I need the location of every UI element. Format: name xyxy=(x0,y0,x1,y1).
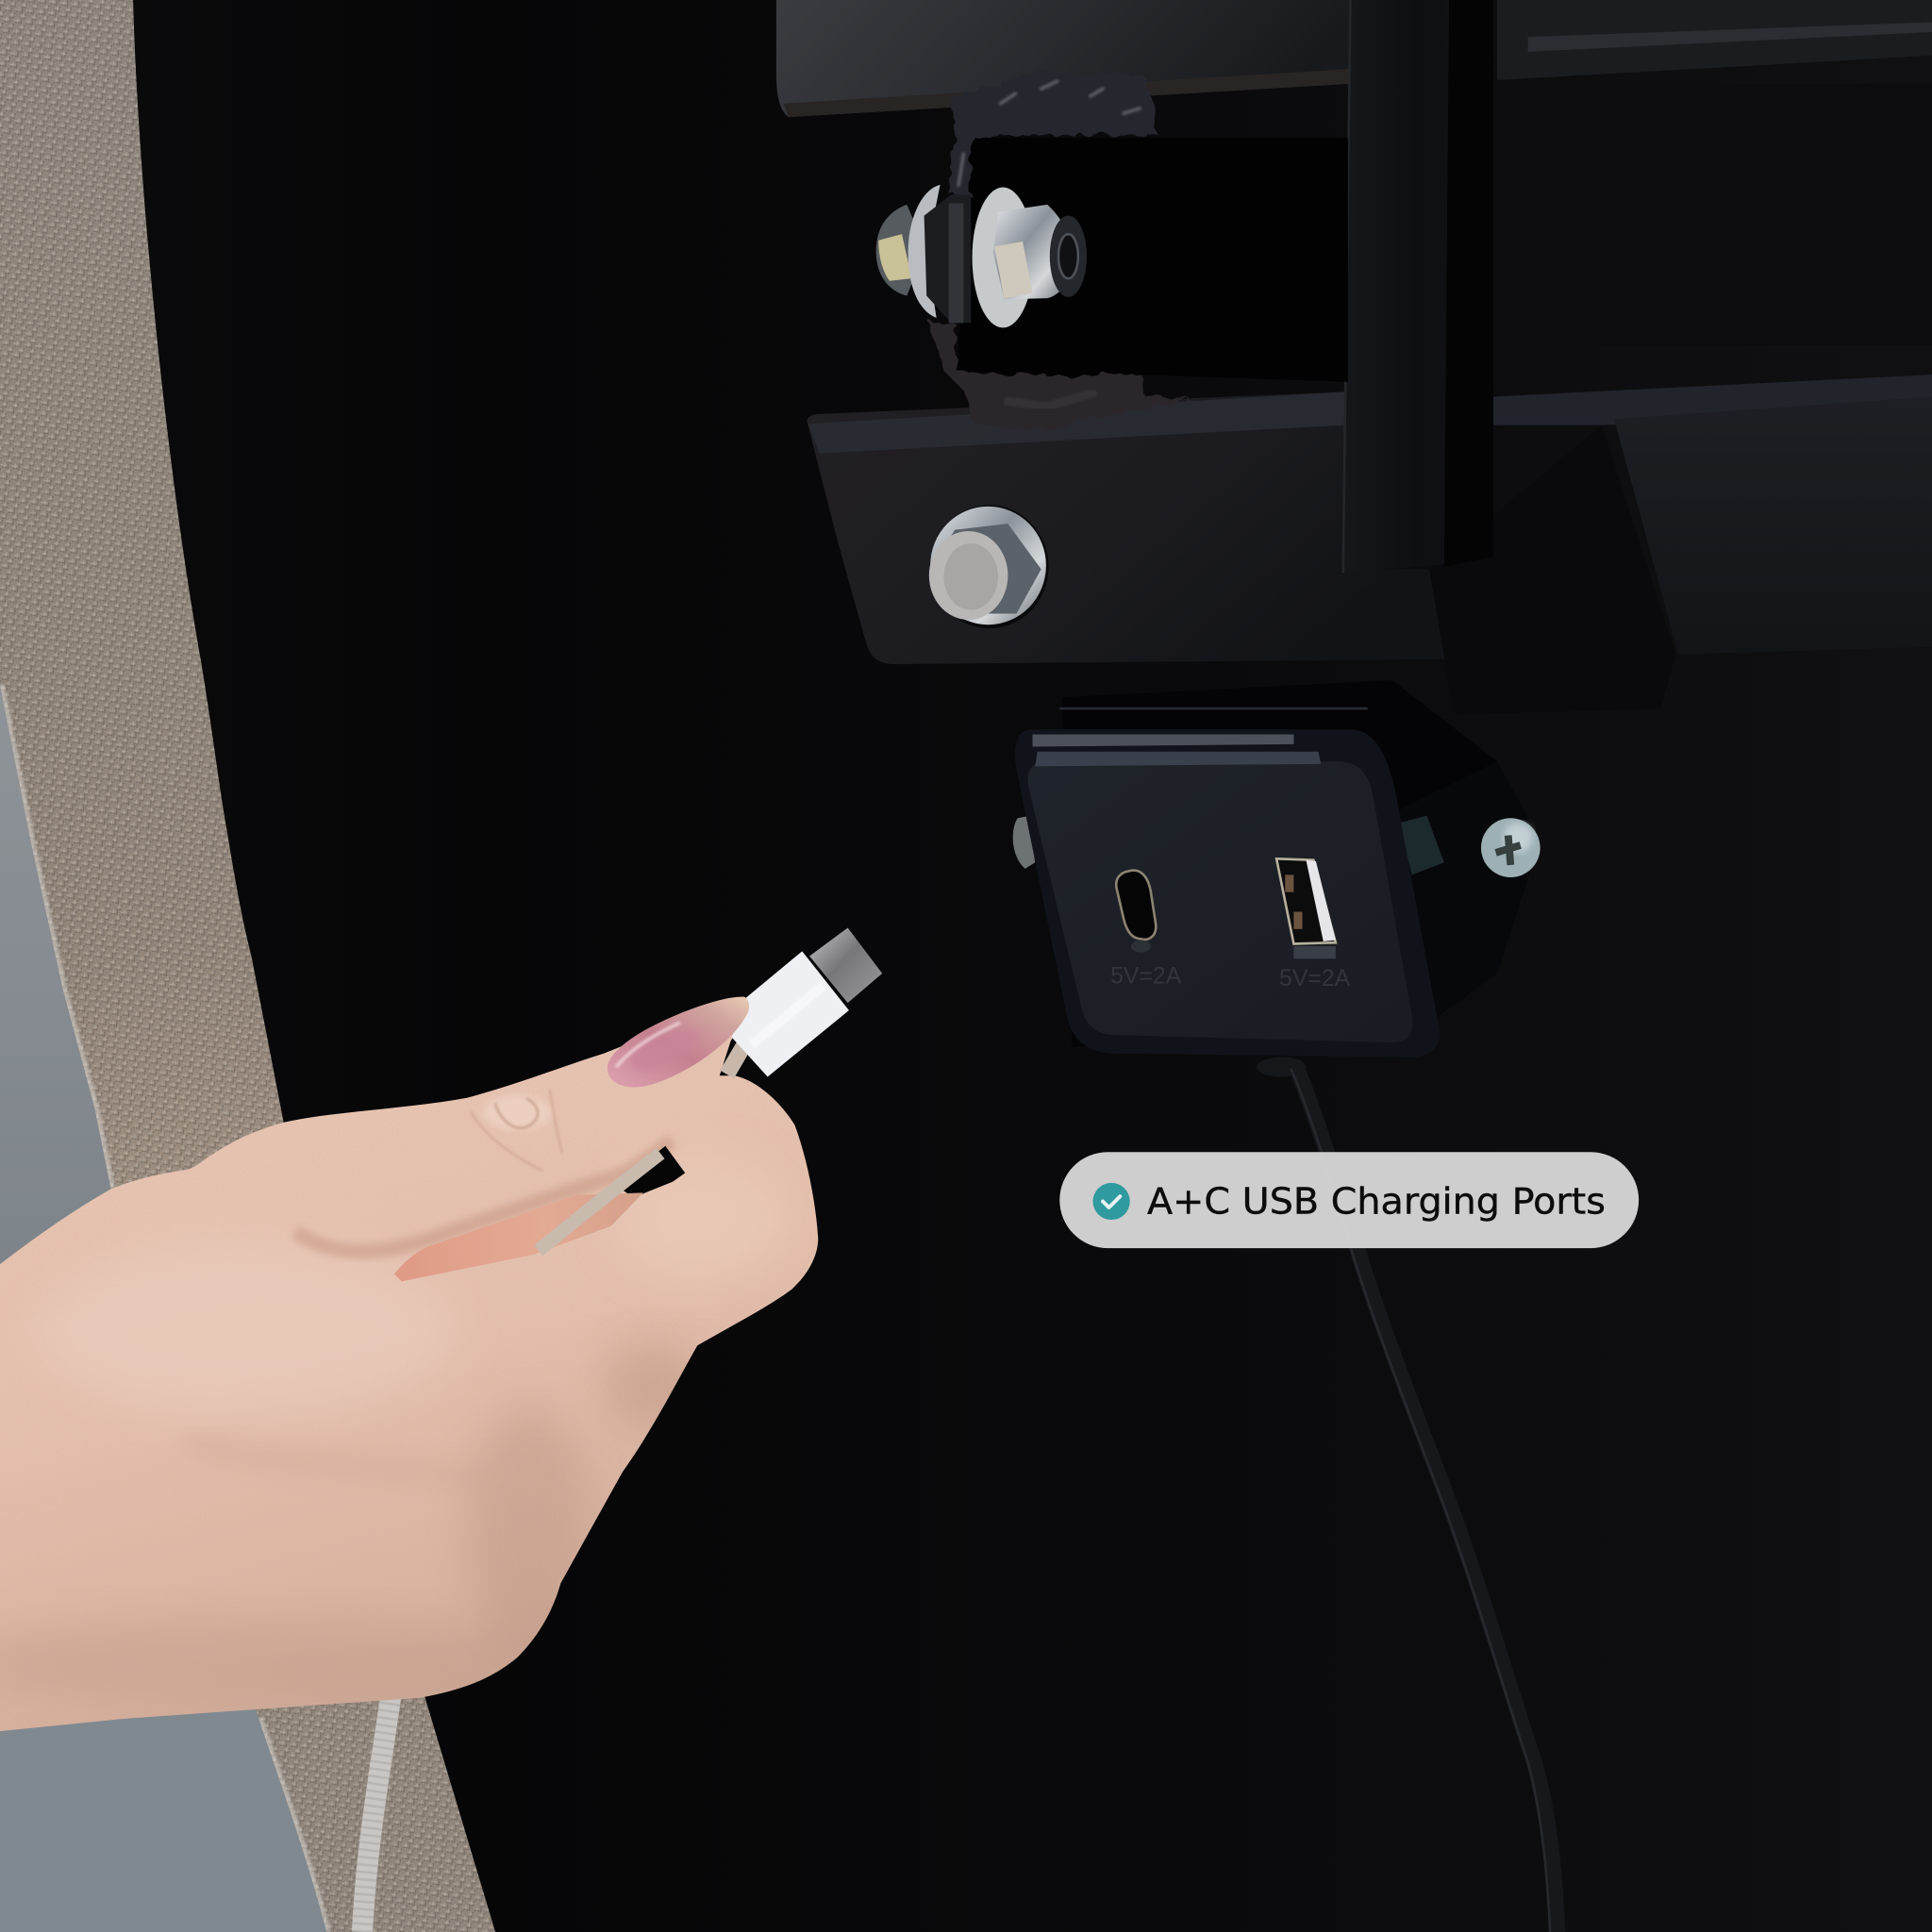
panel: right felt recess xyxy=(1493,84,1932,345)
icon: rough weld around bracket cut-out xyxy=(928,69,1191,430)
panel: vertical steel post xyxy=(1343,0,1493,573)
panel: USB charging module face xyxy=(1015,729,1440,1058)
hand shading xyxy=(0,1136,749,1703)
hand holding cable xyxy=(0,928,882,1750)
background: gray room wall, upper left xyxy=(0,665,148,1306)
port rating label right: 5V=2A xyxy=(1279,966,1351,991)
panel: right side bracket xyxy=(1429,375,1932,715)
pill background xyxy=(1059,1152,1639,1248)
dark gap between finger and thumb xyxy=(616,1146,685,1198)
hand base shape xyxy=(0,997,818,1731)
braided cable in hand xyxy=(539,1154,660,1251)
callout text: A+C USB Charging Ports xyxy=(1147,1181,1606,1223)
panel: dark opening behind weld xyxy=(957,138,1348,382)
icon: USB-A port xyxy=(1276,858,1336,958)
cable at grip xyxy=(727,1045,744,1074)
icon: USB-C port xyxy=(1116,871,1156,953)
panel: lower bracket plate xyxy=(808,391,1452,664)
nail xyxy=(608,997,749,1087)
panel: USB module mounting plate xyxy=(1059,680,1541,1047)
background: gray room wall, lower left xyxy=(0,1700,351,1932)
icon: white braided cable hanging down xyxy=(362,1688,391,1932)
icon: hex flange bolt xyxy=(929,506,1049,628)
icon: teal check badge xyxy=(1093,1183,1130,1220)
USB-C white connector xyxy=(732,951,849,1077)
callout: feature pill label xyxy=(1059,1152,1639,1248)
panel: upper right steel bar xyxy=(1497,0,1932,80)
icon: through bolt with washers and nut xyxy=(876,185,1087,327)
icon: mounting screw left and inner screw xyxy=(1013,816,1444,874)
panel: upper steel bar xyxy=(776,0,1351,117)
panel: woven fabric headboard edge xyxy=(0,0,518,1932)
USB-C metal tip xyxy=(809,928,882,1003)
port rating label left: 5V=2A xyxy=(1110,963,1182,989)
knuckle wrinkles on finger xyxy=(471,1091,562,1171)
inner finger xyxy=(394,1192,643,1281)
icon: black power cord xyxy=(1257,1058,1557,1932)
icon: mounting screw right xyxy=(1481,818,1541,877)
